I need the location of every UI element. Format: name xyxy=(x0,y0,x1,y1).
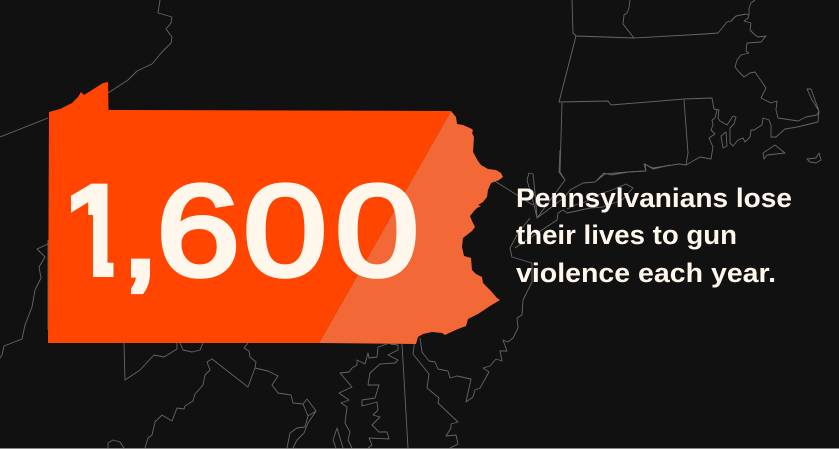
description text: Pennsylvanians lose xyxy=(516,183,792,213)
bottom edge line xyxy=(0,448,839,449)
Pennsylvania dark orange segment xyxy=(48,82,451,343)
Pennsylvania light segment xyxy=(319,111,503,344)
headline number: 1,600 xyxy=(54,159,419,303)
description text: violence each year. xyxy=(516,258,776,288)
description text xyxy=(516,183,792,288)
description text: their lives to gun xyxy=(516,220,737,250)
Pennsylvania map shape xyxy=(48,82,503,344)
